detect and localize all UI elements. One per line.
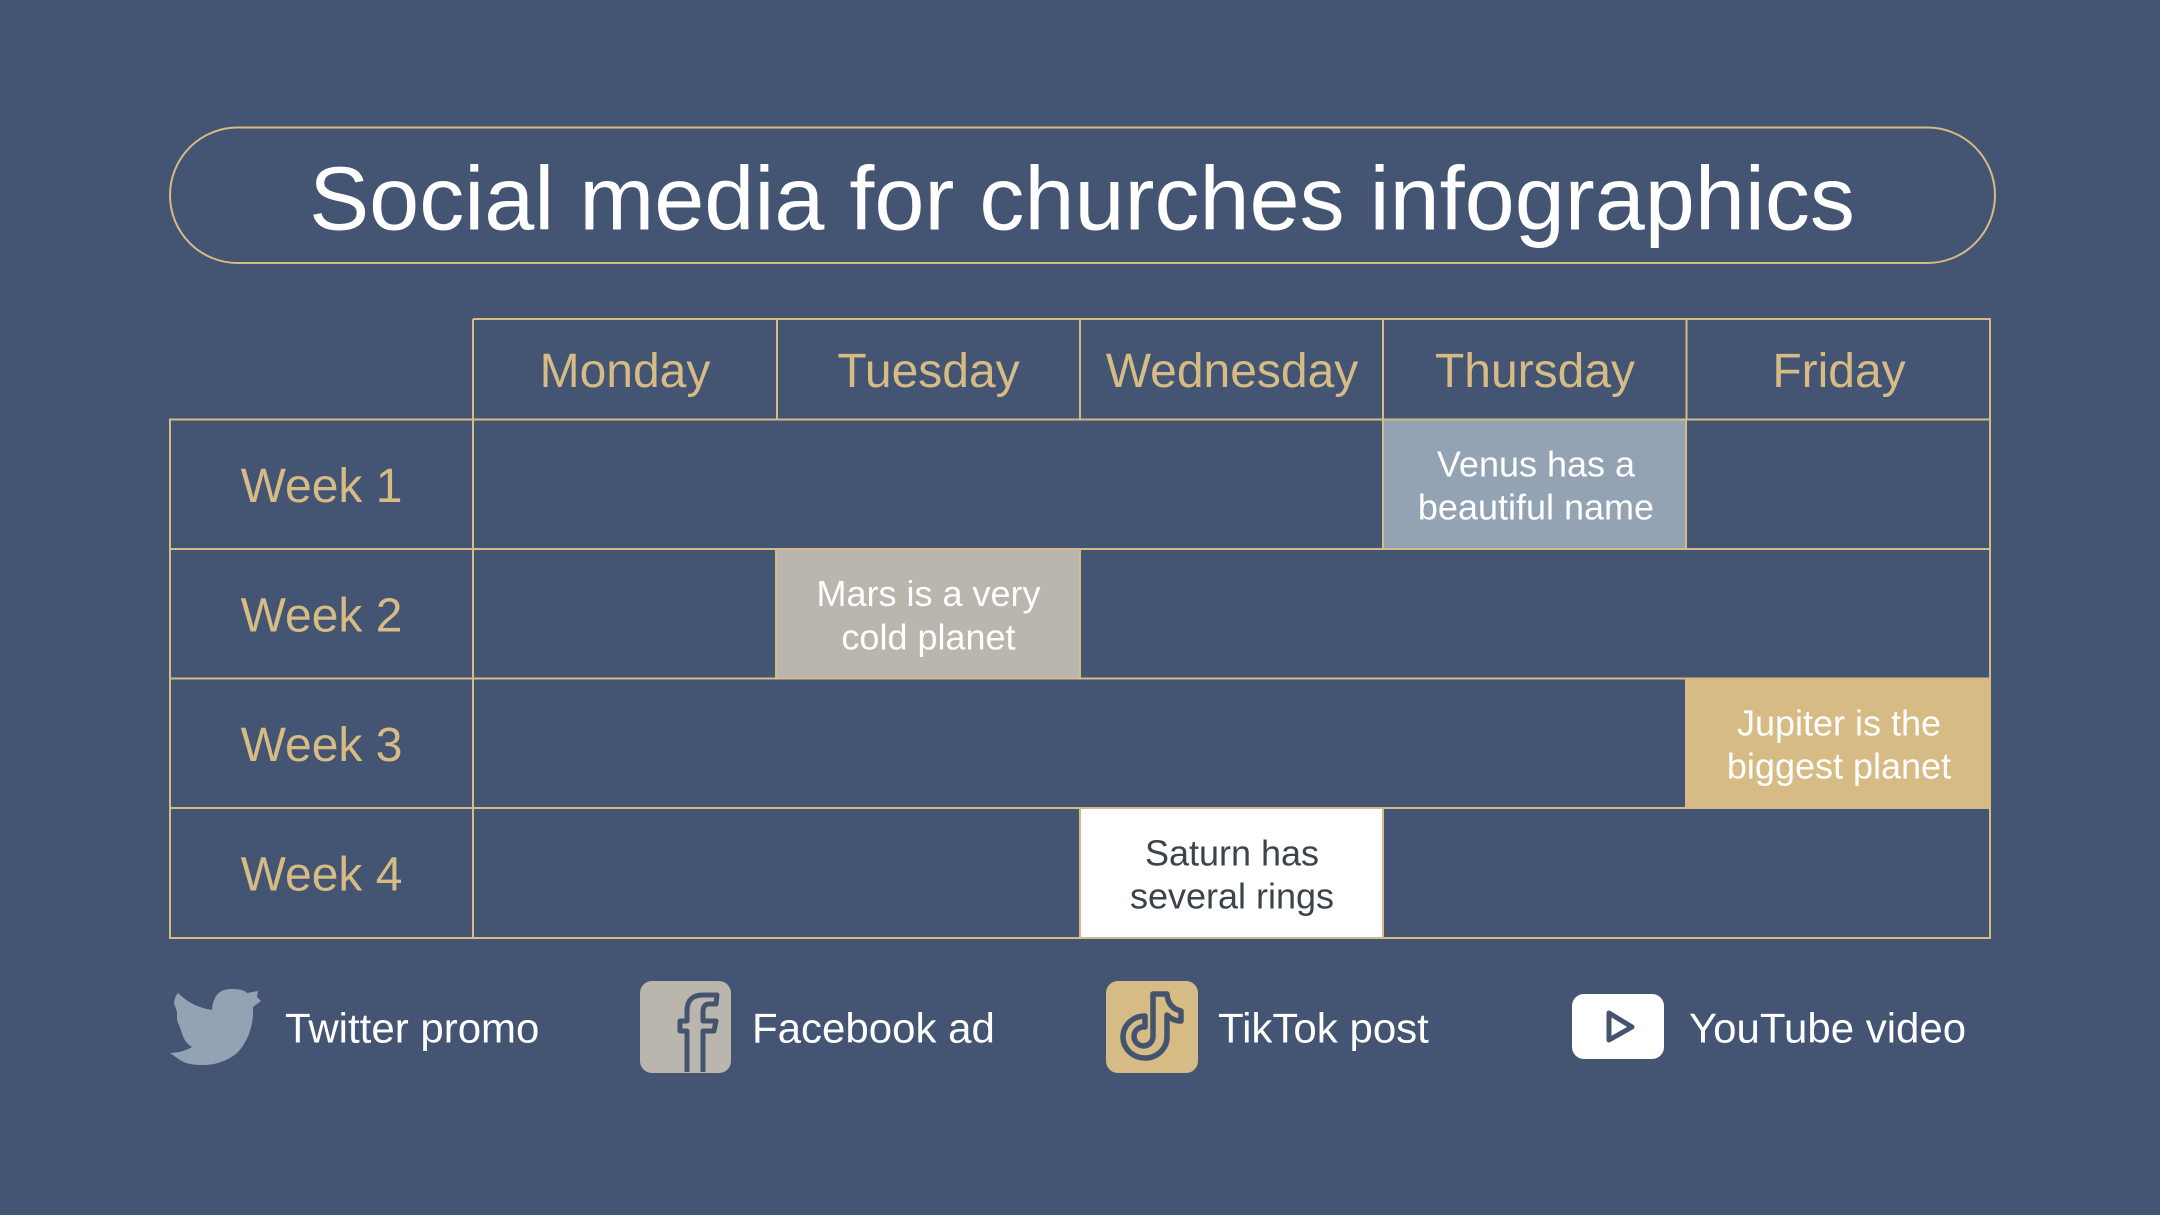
day headers [540,345,1906,398]
day headers: Thursday [1435,345,1635,398]
label: twitter: Twitter promo [285,1004,539,1052]
highlighted cell: Saturn [1080,808,1383,938]
title: Social media for churches infographics [309,150,1855,250]
highlighted cell: Saturn: Saturn has [1145,832,1319,874]
day headers: Wednesday [1106,345,1358,398]
icon: twitter [170,989,261,1065]
week labels: Week 2 [241,590,402,642]
highlighted cell: Mars: Mars is a very [816,573,1041,614]
highlighted cell: Mars [776,549,1080,678]
week labels [241,460,402,902]
highlighted cell: Saturn: several rings [1130,876,1334,916]
icon: tiktok [1106,981,1198,1073]
highlighted cell: Venus: beautiful name [1418,486,1654,528]
highlighted cell: Venus [1383,420,1686,549]
highlighted cell: Jupiter [1686,678,1990,808]
title [170,128,1995,263]
week labels: Week 3 [241,719,402,772]
legend [170,981,1966,1073]
week labels: Week 1 [241,460,402,513]
schedule table [170,319,1990,938]
label: tiktok: TikTok post [1218,1004,1429,1052]
icon: facebook [640,981,731,1073]
label: facebook: Facebook ad [752,1004,995,1052]
highlighted cell: Venus: Venus has a [1437,444,1636,484]
icon: youtube [1572,994,1664,1059]
week labels: Week 4 [241,848,402,902]
highlighted cell: Jupiter: biggest planet [1727,746,1951,786]
day headers: Tuesday [837,345,1020,398]
day headers: Monday [540,345,710,398]
highlighted cell: Mars: cold planet [841,616,1016,658]
label: youtube: YouTube video [1689,1004,1966,1052]
day headers: Friday [1772,345,1906,398]
highlighted cell: Jupiter: Jupiter is the [1737,702,1941,744]
